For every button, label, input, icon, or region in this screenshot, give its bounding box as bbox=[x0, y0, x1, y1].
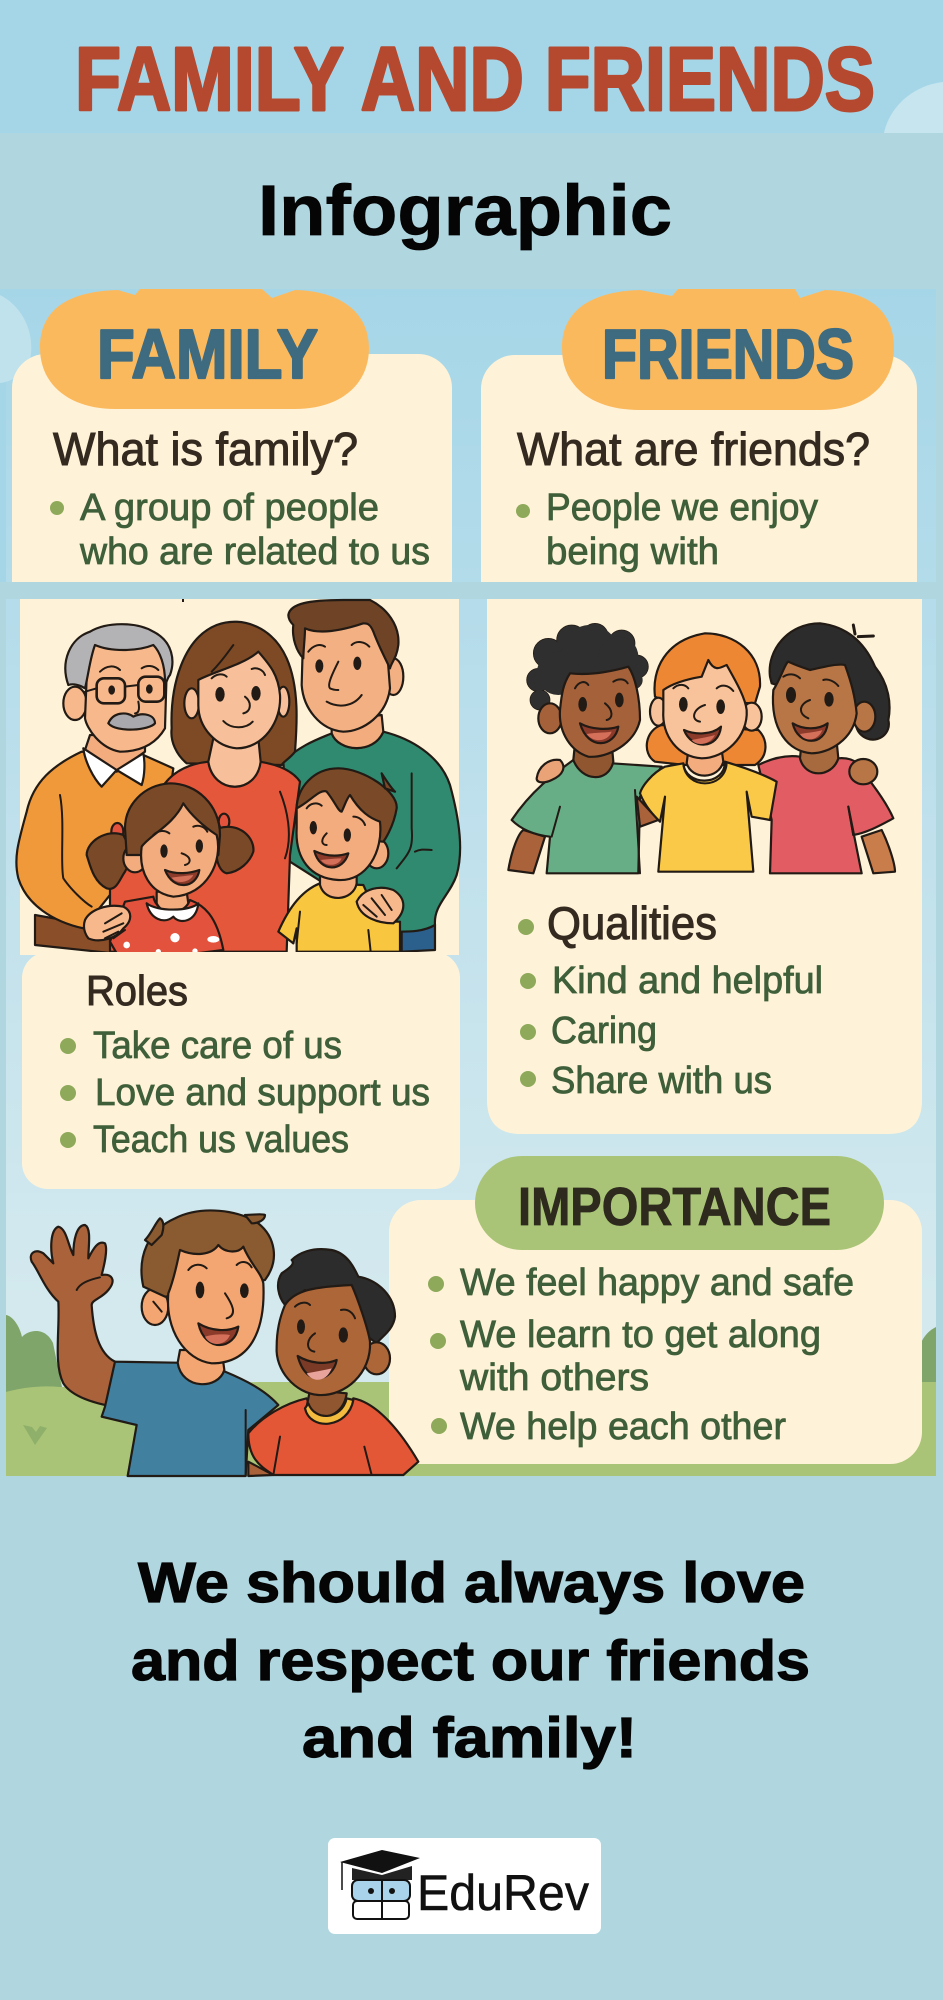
tick marks bbox=[183, 599, 646, 602]
icon: graduation cap mascot bbox=[340, 1850, 420, 1919]
family heading pill bbox=[40, 289, 369, 409]
what is family heading: What is family? bbox=[53, 423, 358, 475]
family definition: A group of people bbox=[80, 487, 379, 529]
importance list: We learn to get along bbox=[460, 1314, 821, 1356]
waving boy bbox=[31, 1210, 278, 1476]
logo: EduRev: EduRev bbox=[417, 1865, 589, 1921]
boy bbox=[278, 768, 403, 952]
man bbox=[283, 600, 460, 952]
subtitle: Infographic bbox=[258, 172, 672, 251]
family heading pill: FAMILY bbox=[97, 315, 318, 393]
importance list: with others bbox=[459, 1357, 649, 1399]
illustration: family group bbox=[16, 600, 460, 954]
panel: importance bbox=[389, 1156, 922, 1464]
closing message bbox=[131, 1551, 810, 1770]
friends definition bbox=[516, 487, 818, 573]
roles list: Teach us values bbox=[93, 1119, 349, 1161]
panel: family illustration background bbox=[20, 599, 459, 955]
closing message: and respect our friends bbox=[131, 1629, 810, 1693]
family definition: who are related to us bbox=[79, 531, 430, 573]
friends heading pill bbox=[562, 289, 894, 410]
panel: roles bbox=[22, 952, 460, 1189]
roles list: Take care of us bbox=[93, 1025, 342, 1067]
panel: qualities list: Caring bbox=[551, 1010, 657, 1052]
illustration: two friends waving bbox=[31, 1210, 418, 1476]
family definition bbox=[50, 487, 430, 573]
panel: qualities list: Kind and helpful bbox=[552, 960, 823, 1002]
friend: right child bbox=[758, 623, 895, 873]
panel: qualities list: Share with us bbox=[551, 1060, 772, 1102]
what are friends heading: What are friends? bbox=[517, 423, 870, 475]
closing message: and family! bbox=[302, 1706, 637, 1770]
mother bbox=[110, 622, 300, 952]
illustration: three friends bbox=[508, 623, 895, 873]
importance list: We feel happy and safe bbox=[460, 1262, 854, 1304]
grandfather bbox=[16, 624, 173, 953]
importance pill: IMPORTANCE bbox=[518, 1177, 831, 1237]
friend: middle girl bbox=[637, 633, 777, 872]
friend: left boy bbox=[508, 623, 662, 873]
importance list bbox=[428, 1262, 854, 1448]
illustrated sky background bbox=[0, 289, 936, 1476]
importance pill bbox=[475, 1156, 884, 1250]
importance list: We help each other bbox=[460, 1406, 786, 1448]
panel: qualities list: Qualities bbox=[547, 897, 717, 949]
logo: EduRev bbox=[328, 1838, 601, 1934]
panel: qualities list bbox=[518, 897, 823, 1102]
smaller boy bbox=[248, 1249, 418, 1476]
friends definition: being with bbox=[546, 531, 719, 573]
closing message: We should always love bbox=[138, 1551, 805, 1615]
friends definition: People we enjoy bbox=[546, 487, 818, 529]
panel: friends details card bbox=[487, 599, 922, 1134]
roles list bbox=[60, 1025, 430, 1161]
panel: family intro bbox=[12, 289, 452, 582]
panel: friends intro bbox=[481, 289, 917, 582]
girl bbox=[84, 783, 253, 954]
roles list: Love and support us bbox=[95, 1072, 430, 1114]
divider band bbox=[0, 582, 943, 599]
title band bbox=[0, 0, 943, 133]
roles heading: Roles bbox=[86, 967, 188, 1014]
friends heading pill: FRIENDS bbox=[602, 315, 854, 393]
